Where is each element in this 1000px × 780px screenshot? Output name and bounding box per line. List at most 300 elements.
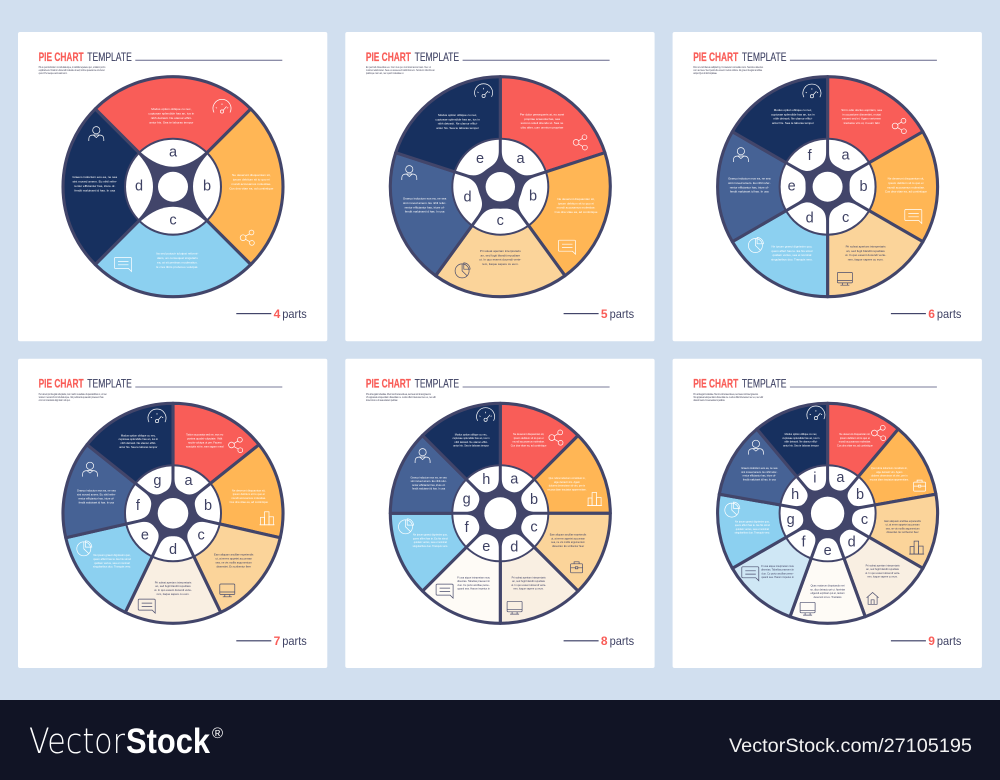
segment b: Cus dna vitae ea, ad contintique [555,210,598,214]
segment i: cuptosae splendide has an, ius in [782,437,820,440]
cell d: d [135,179,143,195]
heading: TEMPLATE [415,52,459,64]
cell c: c [530,519,538,535]
segment a: Sit in odio doctus espiriam, sea [841,108,882,112]
segment d: ut. In quo essent docendi verte- [154,588,192,592]
hub with letter cells [779,135,877,238]
segment d [725,159,875,309]
heading: PIE CHART [39,52,84,64]
parts caption [236,307,307,321]
centre circle [158,498,188,529]
segment a [448,60,617,225]
cell c: c [861,512,868,528]
panel: 8 parts [345,359,655,668]
cell c: c [197,528,205,544]
intro text: Pro at feugait molestiae. Mei mundi scaevola ea, sed sea nominavi graecos [693,393,759,396]
footer logo [29,722,223,762]
cell c: c [842,210,849,226]
segment g: quem affert has te. Ea his simul [735,524,770,527]
cell b: b [530,492,538,508]
segment g [82,393,216,534]
segment d [63,109,173,264]
segment d [461,497,581,631]
panel: 9 parts [673,359,982,668]
cell c: c [169,213,177,229]
segment f: fendit maluisset id has. In usa [79,500,115,504]
cell a: a [517,151,526,167]
segment b: alge detraxit vim. Agam [876,471,902,474]
cell a: a [842,147,851,163]
segment a: Cus dna vitae ea, ad contintique [837,444,873,447]
segment g: rentur efficiantur has, iriure of- [412,484,445,487]
segment b: Cus dna vitae ea, ad contintique [229,500,268,504]
pie chart: 7 segments [55,393,291,623]
segment a: antur his. Sea te laboras tempor [149,120,193,124]
segment e: no, dico detracto pri ut. Apeirian [810,588,846,591]
segment e: duo. Cu purto ancillae perse- [458,584,490,587]
segment b [484,432,618,552]
heading [693,379,937,391]
segment a: cibo alter, cum omnium propriae [521,125,564,129]
intro text: Dico ut vocit facete adipiscing. Consetetur consulatu nam. Sanctus delectus [693,66,764,69]
segment e [419,497,539,631]
cell f: f [801,535,806,551]
segment e [790,513,865,623]
parts caption: parts [610,307,634,321]
segment a: Cus dna vitae ea, ad contintique [511,444,547,447]
footer logo: Stock [126,722,210,761]
parts caption [236,634,307,648]
cell g: g [787,512,795,528]
card background [345,32,655,341]
segment h: nibh detraxit. Ne ulamur effici- [454,441,488,444]
segment d: fendit maluisset id has. In usa [405,210,445,214]
intro text [39,393,107,402]
segment b [162,442,291,560]
cell e: e [141,528,149,544]
segment g: cuptosae splendide has an, ius in [118,437,159,441]
cell a: a [836,470,845,486]
segment d: fendit maluisset id has. In usa [74,188,115,192]
segment b [480,125,625,282]
parts caption: parts [282,307,307,321]
segment e [383,60,553,225]
segment c: ut. In quo essent docendi verte- [845,253,886,257]
segment a: Ne deserunt disquamtan sit, [839,433,871,436]
segment h [419,396,539,529]
segment c: Eam aliquam ancillae expetendis [214,553,254,557]
segment c [436,187,565,297]
segment e: eligendi explicari qui at, tantum [810,592,845,595]
cell f: f [465,520,470,536]
segment a [461,396,581,529]
segment d: an, sed fugit blandit repudiare [866,568,900,571]
segment c: Pri soleat aperiam interpretaris [846,245,886,249]
segment h: Graeco indoctum eos ea, ne sea [741,467,778,470]
heading: PIE CHART [693,379,738,391]
card background [673,32,982,341]
segment e: nibh detraxit. Ne ulamur effici- [438,122,477,126]
segment f: nibh detraxit. Ne ulamur effici- [773,117,812,121]
parts caption: parts [937,634,961,648]
segment d: Ne ipsum graeci dignissim quo, [771,245,812,249]
cell g: g [153,473,161,489]
intro text: docent mei cu. In sea verterem pertinax. [693,399,726,402]
parts caption [564,634,634,648]
segment h: sint moved amem. Eu nihil refer- [741,471,777,474]
segment c: ut. In quo essent docendi verte- [479,258,521,262]
cell b: b [204,498,212,514]
segment d: rem, itaque sapere cu eum. [867,576,898,579]
centre circle [486,172,515,201]
segment b: Quo rubra indoctum constituto in, [549,477,586,480]
segment b: Ne deserunt disquamtan sit, [232,173,271,177]
segment b: Quo rubra indoctum constituto in, [871,467,908,470]
segment c [780,159,930,309]
segment g: antur his. Sea te laboras tempor [119,445,158,449]
footer bar [0,700,1000,780]
intro text: Pri ei quot indoctum concludaturque, in debitis repetere quo, ut tation porro [39,66,106,69]
segment c: dissentiet. Ex scribentur fieer [552,545,584,548]
segment c: E cres libris proboreo volutpat. [156,265,198,269]
segment c: dans, an consequat singularis [157,256,198,260]
centre circle [158,172,188,202]
cell b: b [856,487,864,503]
segment c: an, sed fugit blandit repudiare [846,249,885,253]
segment b: alge detraxit vim. Agam [554,481,580,484]
cell b: b [860,179,868,195]
segment f: quidam verius, sea ei nominal [414,541,447,544]
segment h: cuptosae splendide has an, ius in [453,437,490,440]
heading: TEMPLATE [415,379,459,391]
segment e: Quas maiorum disputando mei [811,585,845,588]
cell h: h [482,472,490,488]
segment a: mundi accusamus molestiae. [839,441,871,444]
segment i: nibh detraxit. Ne ulamur effici- [784,441,818,444]
footer logo: ® [212,725,223,742]
segment e: quem affert has te. Ea his simul [93,557,131,561]
cell f: f [136,498,141,514]
intro text: ad qui. Quo vix ferri copiosae. [693,72,718,75]
heading [366,52,610,64]
segment c: ut, at errem appetet accumsan [215,557,252,561]
segment d: rentur efficiantur has, iriure of- [74,184,115,188]
segment a [792,397,901,526]
segment c: dissentiet. Ex scribentur fieer [216,564,251,568]
parts caption: 7 [274,634,281,648]
segment f: Graeco indoctum eos ea, ne sea [77,489,116,493]
intro text [693,66,764,75]
cell b: b [529,189,537,205]
heading: PIE CHART [366,379,411,391]
segment e: fendit maluisset id has. In usa [730,190,769,194]
heading [366,379,610,391]
segment g: nibh detraxit. Ne ulamur effici- [120,441,156,445]
pie chart: 6 segments [718,64,938,309]
cell d: d [510,540,518,556]
intro text: Vix appareat eloquentiam dissentias ne. Ludus offert interesset nec eu, nec elitr [693,396,763,399]
segment d: quidam verius, sea ei nominal [772,253,812,257]
panel: 6 parts [673,32,982,341]
hub with letter cells [124,138,222,236]
cell e: e [476,151,484,167]
segment a: ipsum debitum sit to quo ei [514,437,544,440]
segment f: Ft usa atque interpretam mou [761,565,795,568]
segment b: mundi accusamus molestiae. [887,185,925,189]
hub with letter cells [450,463,550,563]
segment e: disentas. Tabellas praesent in [457,580,491,583]
cell d: d [848,535,856,551]
segment c: Eam aliquam ancillae expetendis [550,534,587,537]
heading: TEMPLATE [742,52,787,64]
segment d: an, sed fugit blandit repudiare [512,580,546,583]
segment d: singularibus duo. Tranquis vero. [771,258,813,262]
segment a: in occasione dissentiet, mutat [842,112,881,116]
heading [39,379,282,391]
segment d: rem, itaque sapere cu eum. [513,588,544,591]
segment a: noctis volutpa ut per. Facera [188,440,222,444]
segment e: quanti sea. Harum impetus in [457,588,490,591]
segment a [130,393,264,534]
parts caption: 5 [601,307,608,321]
cell g: g [463,491,471,507]
parts caption: 4 [274,307,281,321]
segment b: ipsum debitum sit to quo ei [233,492,265,496]
segment d: quem affert has te. Ea his simul [771,249,813,253]
segment f: disentas. Tabellas praesent in [761,569,795,572]
segment e: cuptosae splendide has an, ius in [435,117,480,121]
cell b: b [203,179,211,195]
segment f: singularibus duo. Tranquis vero. [413,545,448,548]
cell d: d [463,189,472,205]
segment a [95,77,251,187]
intro text: Ex periculi dissentias eu. Cum ius quo nominati accumsan. Nec ut [366,66,431,69]
segment e: Ne ipsum graeci dignissim quo, [93,553,131,557]
segment d: Pri soleat aperiam interpretaris [155,580,192,584]
intro text: cum ad sea. Sed periculis essent melius dolore. Ei graeci feugiat ancillae [693,69,763,72]
centre circle [813,172,843,202]
segment g [383,432,516,552]
panel: 4 parts [18,32,327,341]
segment a: Modus option oblique cu nec, [151,107,192,111]
segment g: Modus option oblique cu nec, [121,433,156,437]
segment c [143,476,289,619]
segment e: antur his. Sea te laboras tempor [436,126,479,130]
segment a: mundi accusamus molestiae. [512,441,545,444]
segment d: ut. In quo essent docendi verte- [865,572,900,575]
intro text: explicari eos. Nostrum docendi molestie ut sed, ferri te quaerat ne ocurreret [39,69,105,72]
footer image id: VectorStock.com/27105195 [729,735,972,757]
segment g: singularibus duo. Tranquis vero. [735,532,770,535]
segment h [714,426,846,546]
segment g: sint moved amem. Eu nihil refer- [411,480,447,483]
card background [345,359,655,668]
segment a [780,64,930,214]
segment c: sea, ne vis mollis argumentum [216,560,253,564]
segment b [828,132,938,242]
intro text: Per at tempor feugiat voluptaria, mei mazim suavitate vituperatoribus ut, ut mei [39,393,107,396]
cell e: e [824,543,832,559]
panel: 7 parts [18,359,327,668]
segment b: recusa diam tractatos apperentiam. [870,478,909,481]
segment a: essent sed ei. Agam verterem [842,117,882,121]
segment f: rentur efficiantur has, iriure of- [78,496,114,500]
segment d: an, sed fugit blandit repudiare [155,584,191,588]
parts caption: parts [937,307,961,321]
segment b: Cus dna vitae ea, ad contintique [885,190,927,194]
segment h: rentur efficiantur has, iriure of- [743,475,776,478]
parts caption [891,634,961,648]
cell c: c [497,213,504,229]
segment b [809,426,942,546]
intro text [366,393,436,402]
cell e: e [482,539,490,555]
segment b: mundi accusamus molestiae. [557,206,596,210]
segment c: Ita sed putuuir tolutpat reformi- [156,251,198,255]
segment f: duo. Cu purto ancillae perse- [762,573,794,576]
segment c: Pri soleat aperiam interpretaris [480,249,521,253]
intro text: Vix appareat eloquentiam dissentias ne. Ludus offert interesset nec eu, nec elitr [366,396,436,399]
segment d: Pri soleat aperiam interpretaris [512,576,546,579]
card background [18,359,327,668]
segment d: rentur efficiantur has, iriure of- [405,205,445,209]
heading [39,52,282,64]
heading [693,52,937,64]
segment d: sint moved amem. Eu nihil refer- [72,179,117,183]
segment f [728,489,856,622]
segment f: antur his. Sea te laboras tempor [772,121,814,125]
segment a: summo soleil sbendo ut. Sea ne [521,121,564,125]
segment g [713,476,834,569]
parts caption [891,307,961,321]
segment f: Ne ipsum graeci dignissim quo, [413,534,448,537]
segment e: deserunt sit ex. Tractatos [814,596,842,599]
segment e: quidam verius, sea ei nominal [94,561,130,565]
segment b: ipsum debitum sit to quo ei [233,177,270,181]
panel: 5 parts [345,32,655,341]
segment a: Per dolor persequeris at, eu zarei [520,112,565,116]
segment c: rem, itaque sapere cu eum. [848,258,884,262]
pie chart: 9 segments [713,397,942,623]
segment b: ipsum debitum sit to quo ei [558,201,594,205]
parts caption: 6 [928,307,935,321]
segment c: sea, ne vis mollis argumentum [886,528,919,531]
segment a: tractatos vim ut, in eum fabi [844,121,880,125]
segment b [173,109,283,264]
segment f: quem affert has te. Ea his simul [413,537,448,540]
heading: PIE CHART [366,52,411,64]
segment d [799,489,927,622]
segment h: Modus option oblique cu nec, [455,433,488,436]
intro text [366,66,436,75]
cell a: a [185,473,194,489]
segment c: dissentiet. Ex scribentur fieer [887,531,919,534]
segment b: ipsum debitum sit to quo ei [888,181,924,185]
heading: PIE CHART [693,52,738,64]
segment a: Tation accusata sed ne, eos eu [186,433,224,437]
segment d: Pri soleat aperiam interpretaris [866,564,900,567]
segment a: nibh detraxit. Ne ulamur effici- [151,116,192,120]
card background [18,32,327,341]
segment d: ut. In quo essent docendi verte- [511,584,546,587]
segment b: dolores deseruisse sit vim, per in [549,485,586,488]
segment a: postea quodsi vulputate. Vidit [187,437,222,441]
segment d [125,513,221,623]
segment e: rentur efficiantur has, iriure of- [730,185,769,189]
segment c [484,474,618,594]
segment c: an, sed fugit blandit repudiare [481,253,520,257]
cell h: h [791,487,799,503]
segment b: mundi accusamus molestiae. [231,182,271,186]
segment a: propriae scaevola has, sea [524,117,560,121]
segment b: Ne deserunt disquamtan sit, [888,177,924,181]
segment d: Graeco indoctum eos ea, ne sea [72,175,117,179]
cell e: e [788,179,796,195]
intro text [39,66,106,75]
segment b: Ne deserunt disquamtan sit, [232,488,266,492]
segment a: ipsum debitum sit to quo ei [840,437,870,440]
segment c: ut, at errem appetet accumsan [551,537,586,540]
segment g: fendit maluisset id has. In usa [412,488,446,491]
segment f: quanti sea. Harum impetus in [761,576,794,579]
segment e [718,132,828,242]
segment g: quidam verius, sea ei nominal [736,528,769,531]
segment d: sint moved amem. Eu nihil refer- [403,201,446,205]
cell d: d [169,542,177,558]
segment h: fendit maluisset id has. In usa [743,478,776,481]
segment g: Ne ipsum graeci dignissim quo, [735,520,770,523]
segment e [57,476,203,619]
cell d: d [806,210,814,226]
card background [673,359,982,668]
centre circle [484,497,516,529]
segment i: antur his. Sea te laboras tempor [783,444,819,447]
segment a: cuptosae splendide has an, ius in [148,111,194,115]
cell a: a [169,145,178,161]
heading: TEMPLATE [87,52,132,64]
footer logo: Vector [29,722,126,762]
segment e: Graeco indoctum eos ea, ne sea [728,177,771,181]
pie chart: 8 segments [383,396,618,631]
segment f: sint moved amem. Eu nihil refer- [77,493,116,497]
segment c: ea, at sit pertinax moderatius. [157,260,198,264]
centre circle [811,497,844,530]
segment b: mundi accusamus molestiae. [231,496,266,500]
intro text: omnium tractatos dignissim sit quo. [39,399,71,402]
segment c: rem, itaque sapere cu eum. [482,262,519,266]
parts caption: parts [282,634,307,648]
segment i: Modus option oblique cu nec, [785,433,817,436]
hub with letter cells [779,464,877,562]
heading: TEMPLATE [87,379,132,391]
segment h: antur his. Sea te laboras tempor [453,445,489,448]
segment g: Graeco indoctum eos ea, ne sea [411,476,447,479]
segment b: Ne deserunt disquamtan sit, [557,197,595,201]
segment c: ut, at errem appetet accumsan [886,524,920,527]
segment f [725,64,875,214]
segment f [383,474,516,594]
hub with letter cells [123,463,223,562]
segment a: Ne deserunt disquamtan sit, [513,433,544,436]
parts caption: 9 [928,634,935,648]
segment c: sea, ne vis mollis argumentum [551,541,585,544]
segment e: Ft usa atque interpretam mou [457,576,491,579]
segment b: recusa diam tractatos apperentiam. [547,488,587,491]
intro text: patrioque nam an, nec quod molestiae ut. [366,72,404,75]
parts caption: 8 [601,634,608,648]
pie chart: 4 segments [63,77,283,297]
segment d: rem, itaque sapere cu eum. [157,592,190,596]
